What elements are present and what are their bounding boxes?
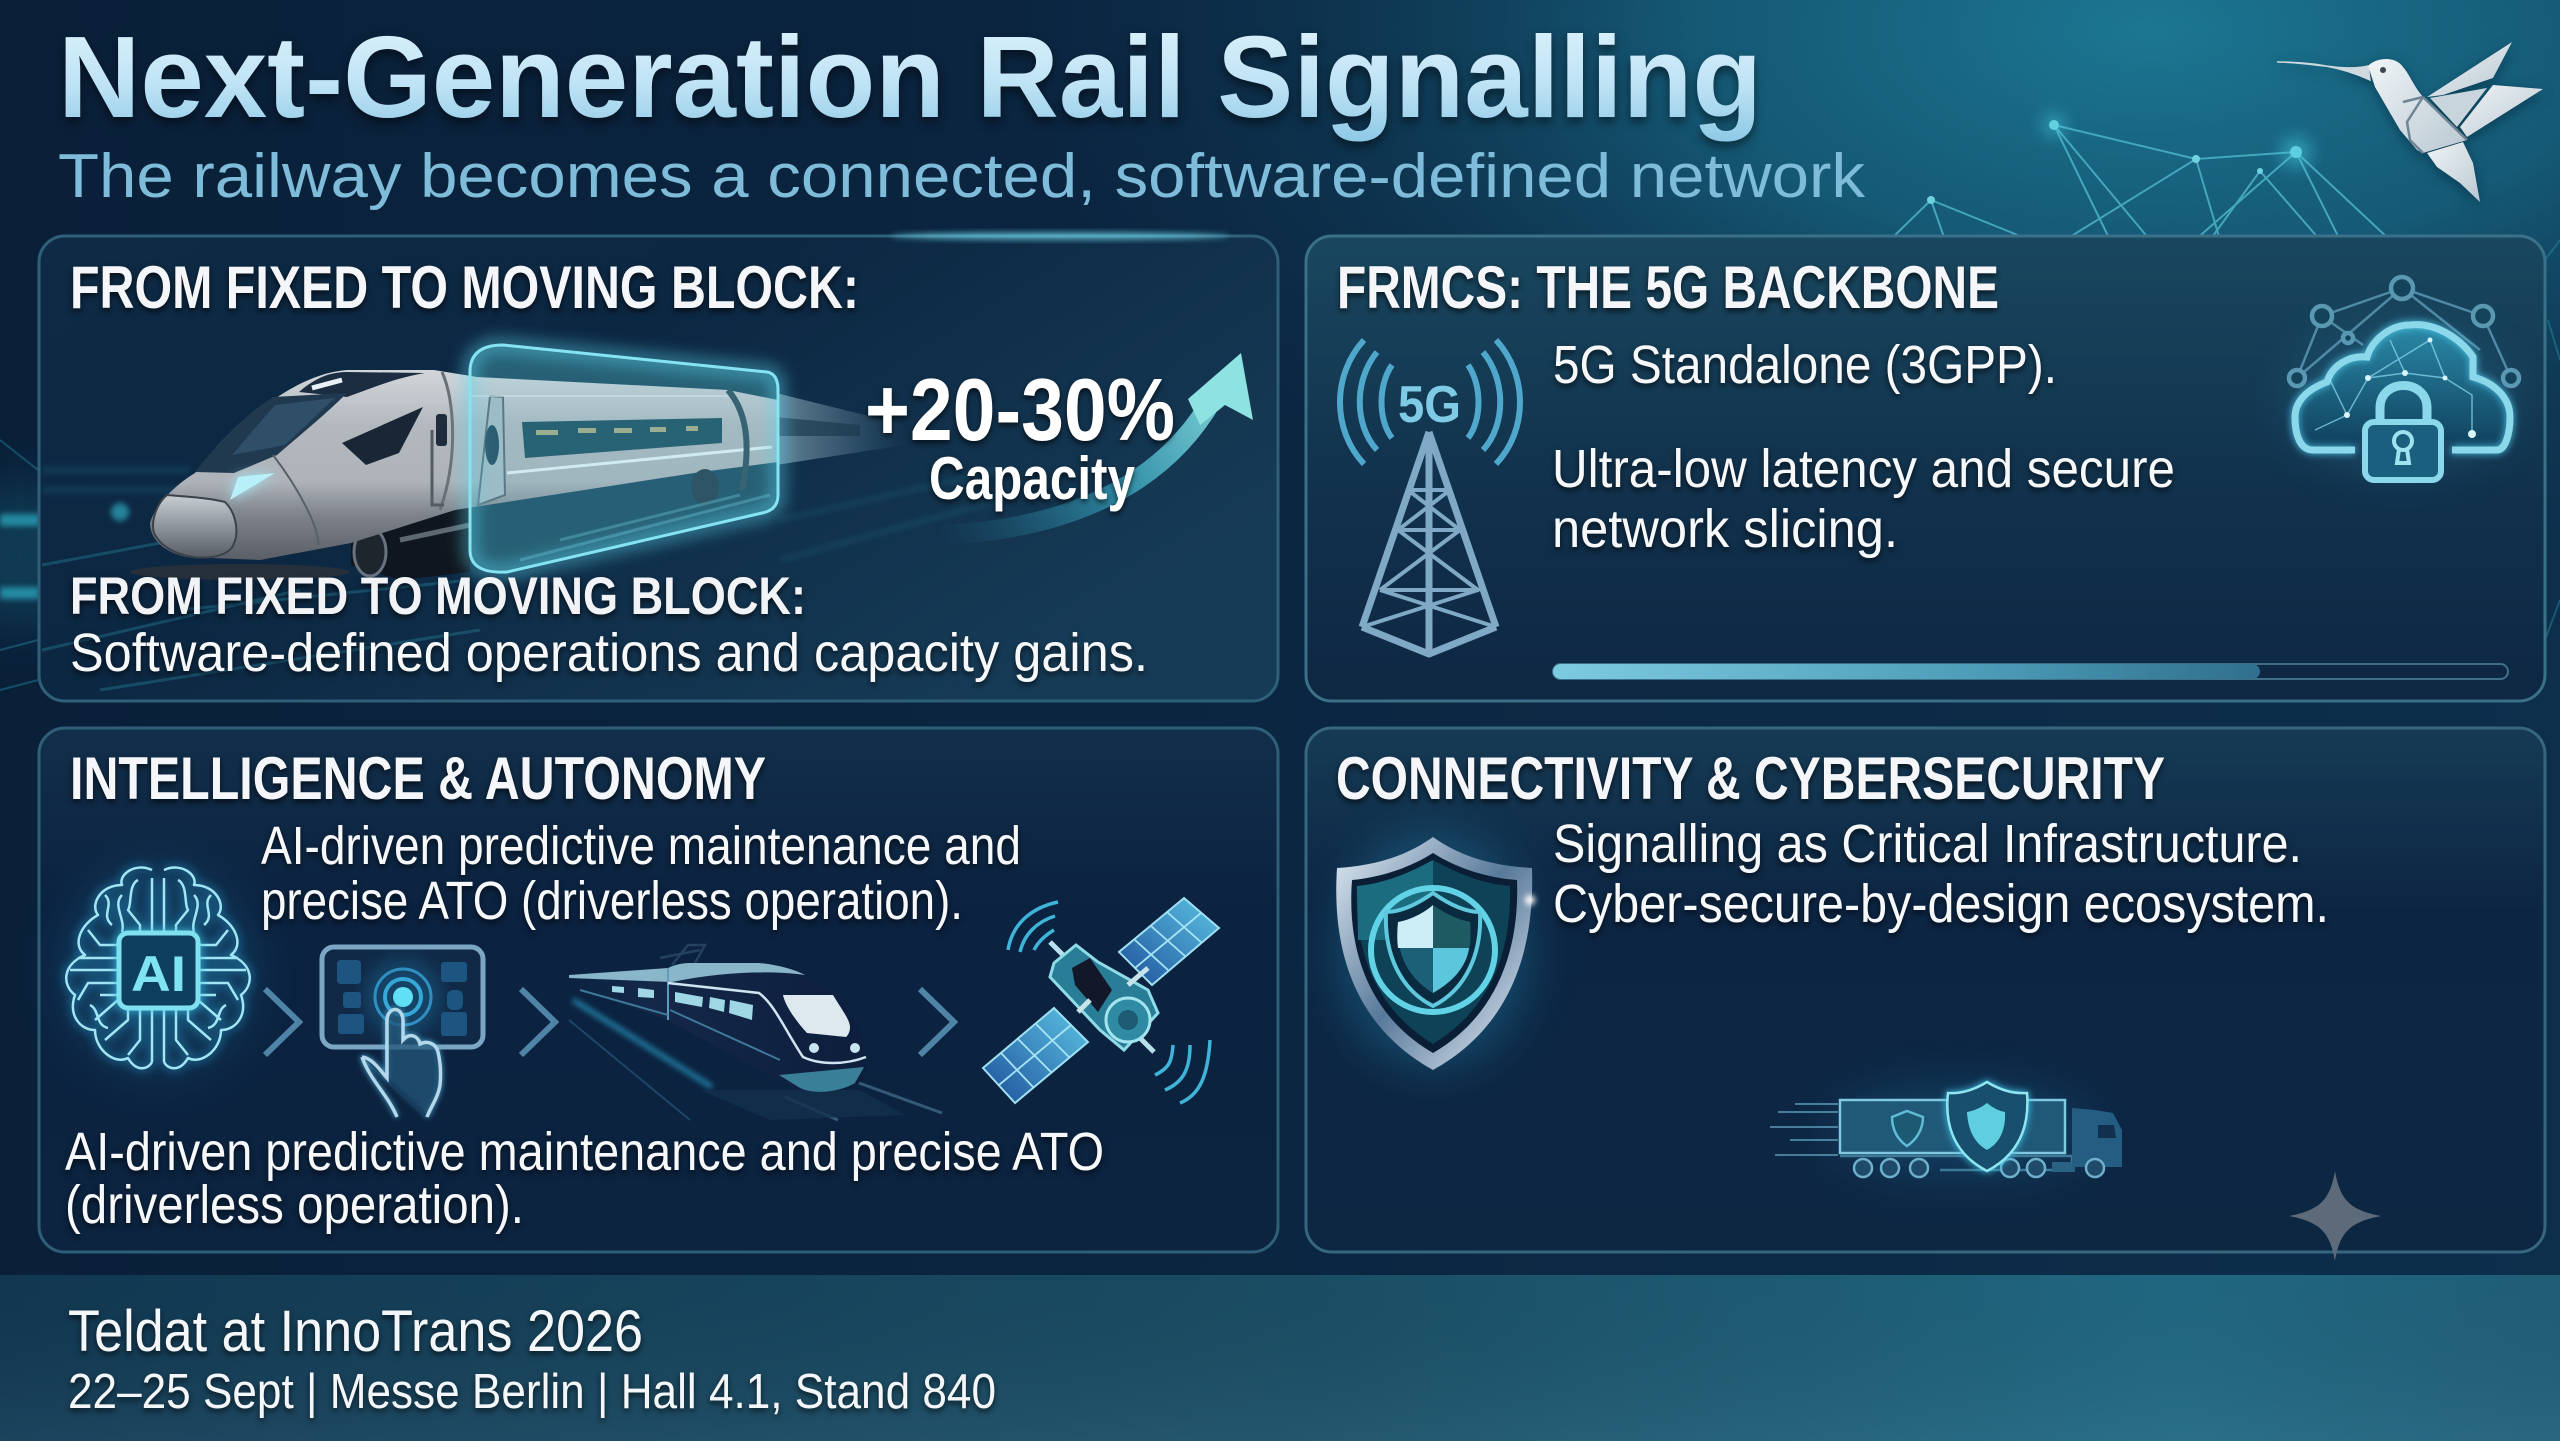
heading: FRMCS: FRMCS: THE 5G BACKBONE [1337, 254, 1999, 321]
icon: secure truck [1770, 1082, 2122, 1177]
footer band [0, 1275, 2560, 1441]
heading: connectivity and cybersecurity: CONNECTIVITY & CYBERSECURITY [1336, 745, 2165, 812]
footer text: dates and stand: 22–25 Sept | Messe Berlin | Hall 4.1, Stand 840 [68, 1365, 996, 1419]
stat: +20-30% capacity [865, 360, 1175, 512]
stat: +20-30% capacity: Capacity [929, 445, 1136, 512]
icon: sparkle watermark [2289, 1171, 2381, 1261]
network constellation [1890, 113, 2390, 240]
text: 5G standalone: 5G Standalone (3GPP). [1553, 335, 2057, 395]
text: latency and slicing: Ultra-low latency and secure [1552, 439, 2175, 499]
progress bar [1553, 664, 2508, 679]
text: AI maintenance lower: AI-driven predictive maintenance and precise ATO [65, 1122, 1104, 1182]
footer text: event name: Teldat at InnoTrans 2026 [68, 1299, 643, 1364]
text: AI maintenance lower [65, 1122, 1104, 1235]
stat: +20-30% capacity: +20-30% [865, 360, 1175, 459]
text: latency and slicing: network slicing. [1552, 499, 1898, 559]
text: AI maintenance upper [261, 816, 1021, 931]
subtitle: The railway becomes a connected, software-defined network [58, 142, 1866, 211]
icon: secure cloud network [2289, 277, 2519, 480]
title: Next-Generation Rail Signalling [58, 12, 1762, 142]
chart arrow: capacity growth [940, 353, 1253, 535]
panel: connectivity and cybersecurity [1306, 728, 2545, 1261]
arrow: chevron 2 [521, 989, 555, 1055]
panel: FRMCS 5G backbone [1306, 236, 2545, 701]
heading: intelligence and autonomy: INTELLIGENCE & AUTONOMY [70, 745, 766, 812]
illustration: train entering moving block [130, 345, 905, 580]
text: critical infrastructure: Cyber-secure-by-design ecosystem. [1553, 874, 2329, 934]
icon: AI brain chip [63, 868, 253, 1070]
text: moving block description: FROM FIXED TO MOVING BLOCK: [70, 567, 806, 626]
text: latency and slicing [1552, 439, 2175, 559]
illustration: autonomous train [569, 945, 942, 1120]
icon: hummingbird logo [2277, 42, 2543, 202]
text: AI maintenance upper: precise ATO (driverless operation). [261, 871, 963, 931]
arrow: chevron 1 [265, 989, 299, 1055]
text: critical infrastructure: Signalling as Critical Infrastructure. [1553, 814, 2302, 874]
icon: 5G tower [1340, 340, 1520, 654]
arrow: chevron 3 [920, 989, 954, 1055]
icon: satellite [983, 898, 1219, 1103]
text: moving block description: Software-defined operations and capacity gains. [70, 623, 1148, 683]
text: moving block description [70, 567, 1148, 683]
icon: AI brain chip: AI [131, 946, 186, 1002]
panel: from fixed to moving block [39, 232, 1278, 701]
icon: 5G tower: 5G [1398, 376, 1461, 434]
text: AI maintenance upper: AI-driven predictive maintenance and [261, 816, 1021, 876]
heading: from fixed to moving block: FROM FIXED TO MOVING BLOCK: [70, 254, 859, 321]
panel: intelligence and autonomy [39, 728, 1278, 1252]
icon: tablet with hand [322, 947, 483, 1117]
text: critical infrastructure [1553, 814, 2329, 934]
text: AI maintenance lower: (driverless operation). [65, 1175, 524, 1235]
icon: shield [1336, 835, 1535, 1070]
